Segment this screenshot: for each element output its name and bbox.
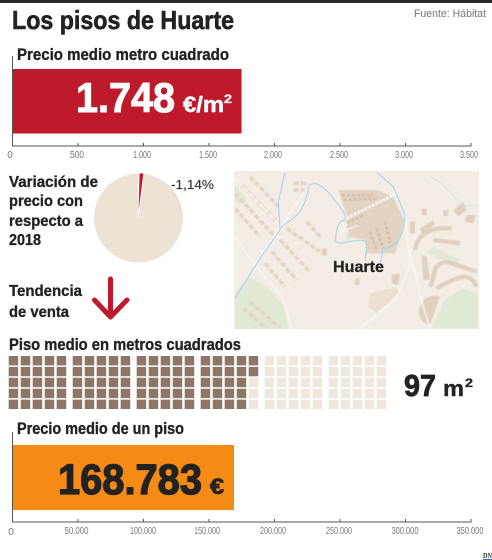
roads [235,178,430,329]
town [338,190,405,253]
text: price variation: precio con [9,193,83,210]
axis: average flat price: 150.000 [194,526,220,537]
axis: average flat price: 0 [8,527,14,538]
axis: average flat price: 100.000 [130,526,156,537]
text: sales trend: de venta [9,304,69,321]
value: 1.748 €/m2: €/m [183,92,224,117]
axis: price per square metre: 3.500 [460,150,478,161]
building blocks [235,177,322,328]
value: 1.748 €/m2: 1.748 [76,74,175,121]
source note: Fuente: Hábitat [414,8,486,20]
text: sales trend [9,283,82,321]
value: 97 m2 [404,368,473,403]
text: price variation: Variación de [9,174,98,191]
panel: price per square metre [7,45,478,161]
heading: average flat price: Precio medio de un piso [17,419,184,438]
axis: price per square metre [7,56,478,161]
river [235,172,478,298]
heading: price per square metre: Precio medio metro cuadrado [17,45,229,64]
axis: average flat price: 200.000 [260,526,286,537]
axis: average flat price [8,432,484,538]
green areas [235,185,478,329]
pie chart: variation [94,173,183,262]
axis: average flat price: 50.000 [64,526,89,537]
bar: 168.783 [12,445,234,510]
value: 1.748 €/m2 [76,74,232,121]
text: price variation: 2018 [9,232,41,249]
axis: price per square metre: 2.000 [264,150,282,161]
axis: price per square metre: 2.500 [330,150,348,161]
value: 1.748 €/m2: 2 [224,92,232,106]
axis: average flat price: 250.000 [326,526,352,537]
waffle chart: 97 of 150 squares [9,356,386,409]
axis: average flat price: 350.000 [456,526,484,537]
heading: flat size: Piso medio en metros cuadrados [9,335,241,354]
axis: price per square metre: 0 [7,150,13,161]
panel: average flat price [8,419,484,538]
map of Huarte [234,171,479,329]
value: 97 m2: 97 [404,368,436,403]
value: 168.783 €: 168.783 [58,456,202,504]
title: Los pisos de Huarte [12,5,234,35]
axis: price per square metre: 1.500 [199,150,217,161]
value: 168.783 €: € [210,474,224,499]
value: 97 m2: m [443,376,464,401]
axis: price per square metre: 3.000 [395,150,413,161]
text: price variation: respecto a [9,213,83,230]
pie label: -1,14% [171,177,214,192]
value: 97 m2: 2 [465,376,473,390]
bar: 1.748 [12,69,242,134]
text: sales trend: Tendencia [9,283,82,300]
map label: Huarte [333,259,384,276]
text: price variation [9,174,98,249]
axis: price per square metre: 1.000 [133,150,151,161]
axis: price per square metre: 500 [70,150,84,161]
icon: down arrow [94,279,127,317]
axis: average flat price: 300.000 [392,526,419,537]
